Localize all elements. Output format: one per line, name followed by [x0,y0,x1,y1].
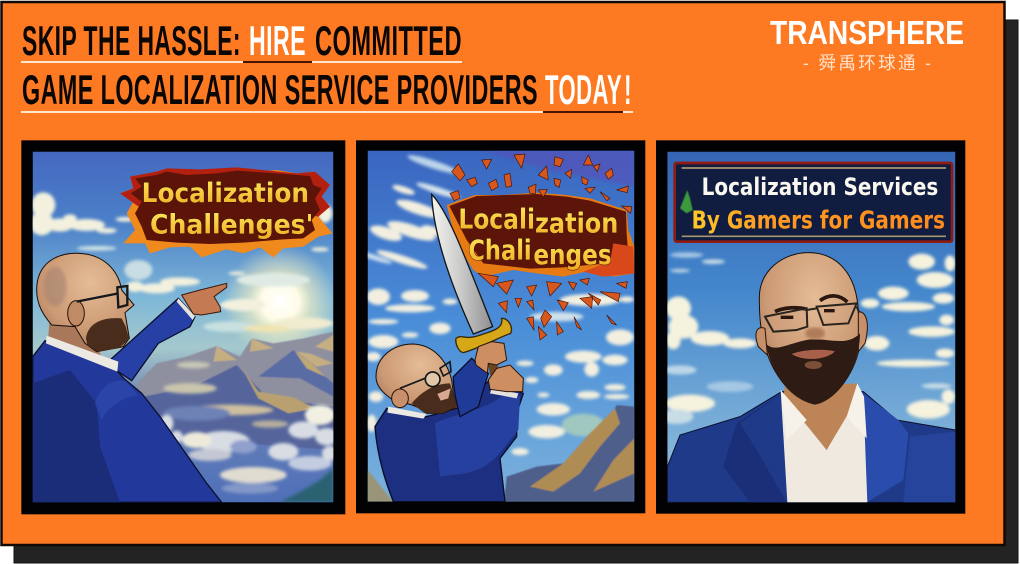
man pointing [33,253,227,502]
jacket [667,392,955,502]
banner red top [120,167,330,217]
clouds [660,252,955,424]
banner text line 2: Challenges' [150,209,313,240]
nose shadow [805,327,825,339]
banner text line 1: Localization [142,178,309,209]
sky [33,152,333,502]
collar [781,383,867,440]
logo wordmark: TRANSPHERE [770,14,964,51]
title [21,17,633,113]
glasses [400,362,451,388]
glasses [77,286,127,307]
sign rules [682,168,946,236]
hands [475,342,523,392]
eyes [781,311,835,317]
head [376,344,457,413]
shattered banner [447,193,634,277]
suit body [33,341,222,502]
suit shadow [33,370,120,502]
banner torn shape [447,193,634,277]
shirt [781,383,867,502]
sky [368,151,634,502]
beard [86,318,129,352]
shattered text line 1: Locali [458,205,535,236]
flying shards [450,154,632,340]
sign line 1: Localization Services [702,173,938,201]
purple sky corner [483,151,634,187]
banner dark core [449,194,628,269]
mountains [137,332,333,450]
lapel right [863,393,908,502]
lower clouds [160,405,338,494]
blade [432,194,493,334]
logo: Transphere [770,14,964,73]
panel 2 illustration [356,147,634,502]
pommel grip [485,342,498,377]
shattered text line 2: enges [533,240,612,271]
suit body [375,380,523,502]
sign [675,163,952,242]
bottom foliage [280,468,333,502]
title line 2 [22,66,632,113]
title line 1: SKIP THE HASSLE: [22,17,241,64]
raised arm [453,358,488,417]
ear [392,389,408,408]
sky [667,152,955,502]
panel: pointing at challenges [21,140,345,514]
title line 2 underline [21,111,633,113]
head [37,253,134,352]
beard [412,383,457,413]
collar [387,407,427,419]
title line 1 underline [21,61,462,63]
shattered text line 2: Chali [468,235,532,266]
shirt collar [46,336,118,372]
sign line 2: By Gamers for Gamers [692,205,945,234]
panel: sword smashing challenges [356,140,645,513]
panel 1 illustration [30,152,338,502]
near mountains [143,365,333,450]
green sparkle [680,190,693,213]
eyebrows [775,296,847,312]
smile patch [792,350,835,359]
pointing arm [110,298,195,381]
shattered text line 1 [458,205,618,240]
glasses lens [425,372,440,387]
man with sword [375,342,523,502]
mountains [368,405,634,502]
hand [182,283,227,315]
mountain lit side [530,408,634,492]
suit shade [435,393,520,477]
sunlit ridges [213,335,333,367]
shattered text line 1: zation [535,209,618,240]
logo Chinese tagline: - 舜禹环球通 - [803,53,931,73]
streaky left clouds [368,153,462,271]
panel 2 frame [356,140,645,513]
challenge banner [120,167,333,257]
title line 2: ! [624,66,632,113]
title line 2: TODAY [545,66,622,113]
panel 1 frame [21,140,345,514]
crossguard [456,318,511,353]
ear [68,301,84,326]
cuff [177,298,195,320]
open mouth [437,388,451,401]
panel 3 frame [656,140,965,514]
clouds [366,288,634,455]
panel 3 illustration [660,152,955,502]
ears [756,312,867,355]
neck [783,383,858,450]
shattered text line 2 [468,235,612,271]
neck [48,322,102,357]
cuff [490,388,518,398]
mid cloud band [163,362,288,428]
jacket highlights [903,432,955,502]
sword [432,194,511,377]
head shading [43,267,67,307]
head [759,253,860,404]
sky clouds [30,192,333,332]
banner dark core [131,171,322,244]
panel: by gamers for gamers [656,140,965,514]
beard [766,333,860,405]
title line 1: COMMITTED [315,17,462,64]
red-orange flare [583,243,634,277]
glasses [765,303,859,332]
sun [226,248,334,344]
chin patch [805,361,822,369]
bottom left hill [368,470,393,502]
title line 1: HIRE [249,17,306,64]
banner burst [120,167,333,257]
distant mountains [136,332,334,407]
lapel left [723,393,787,502]
sign frame [675,163,952,242]
title line 2: GAME LOCALIZATION SERVICE PROVIDERS [22,66,538,113]
